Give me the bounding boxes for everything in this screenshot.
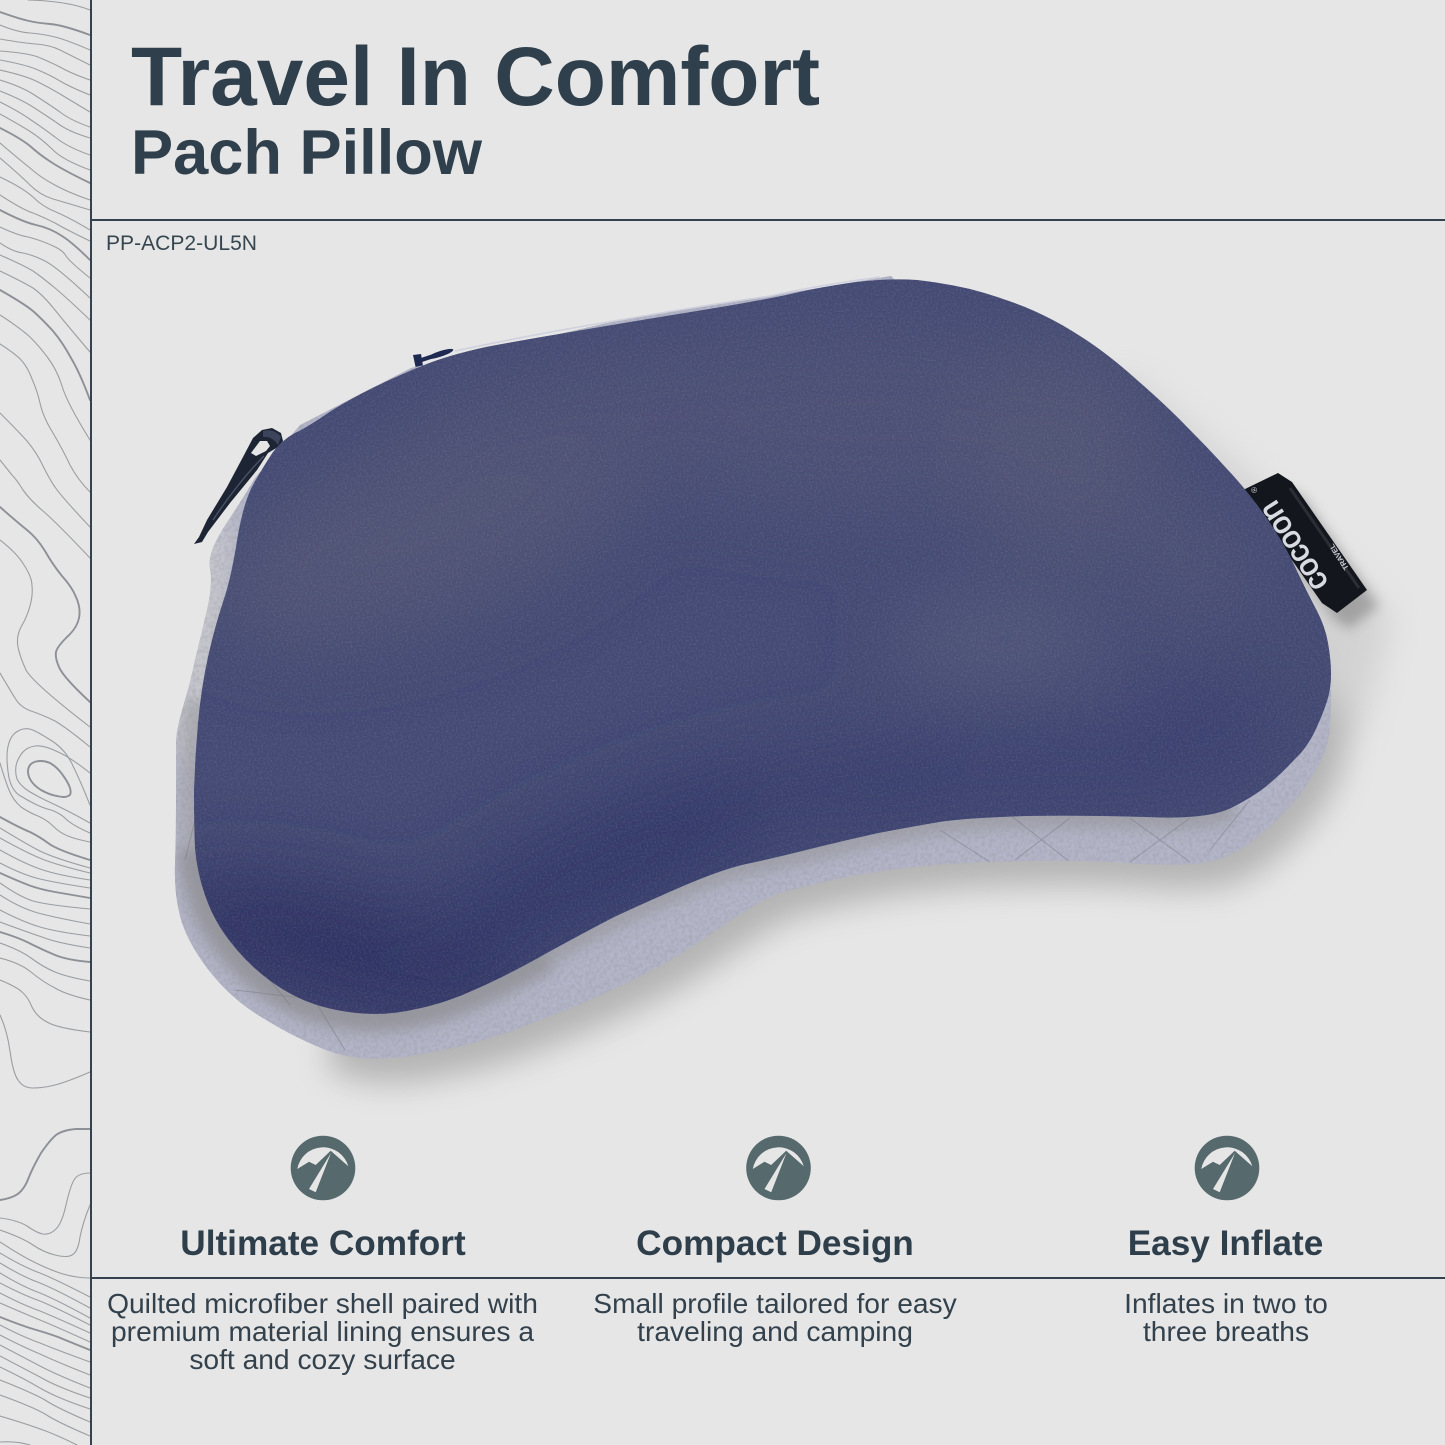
pale top edge of rim — [455, 277, 880, 351]
heading: Compact Design — [636, 1224, 914, 1263]
description: Small profile tailored for easy — [593, 1287, 958, 1319]
icon: mountain badge — [1195, 1136, 1259, 1200]
title: Travel In Comfort — [131, 29, 820, 123]
description: soft and cozy surface — [189, 1343, 456, 1375]
icon: mountain badge — [291, 1136, 355, 1200]
zipper clip — [194, 428, 283, 544]
luggage tag — [1243, 473, 1379, 629]
heading: Easy Inflate — [1128, 1224, 1323, 1263]
heading: Ultimate Comfort — [180, 1224, 466, 1263]
description: traveling and camping — [637, 1315, 913, 1347]
lower horizontal rule — [90, 1277, 1445, 1279]
icon: mountain badge — [746, 1136, 811, 1200]
feature: compact design — [593, 1136, 958, 1347]
feature: ultimate comfort — [107, 1136, 538, 1375]
luggage tag: ® — [1249, 485, 1260, 495]
description: three breaths — [1143, 1315, 1309, 1347]
subtitle: Pach Pillow — [131, 118, 483, 188]
top horizontal rule — [90, 219, 1445, 221]
product code: PP-ACP2-UL5N — [106, 232, 257, 255]
topographic contour strip — [0, 0, 90, 1445]
description: Quilted microfiber shell paired with — [107, 1287, 538, 1319]
feature: easy inflate — [1124, 1136, 1328, 1347]
pillow product illustration — [141, 260, 1392, 1083]
description: Inflates in two to — [1124, 1287, 1328, 1319]
zipper pull — [413, 347, 454, 369]
luggage tag: cocoon — [1252, 495, 1335, 598]
description: premium material lining ensures a — [111, 1315, 534, 1347]
pillow drop shadow — [262, 378, 1392, 1083]
vertical rule — [90, 0, 92, 1445]
grey quilted rim — [150, 260, 1350, 1080]
luggage tag: TRAVEL — [1327, 542, 1351, 572]
navy microfiber top — [194, 279, 1331, 1014]
